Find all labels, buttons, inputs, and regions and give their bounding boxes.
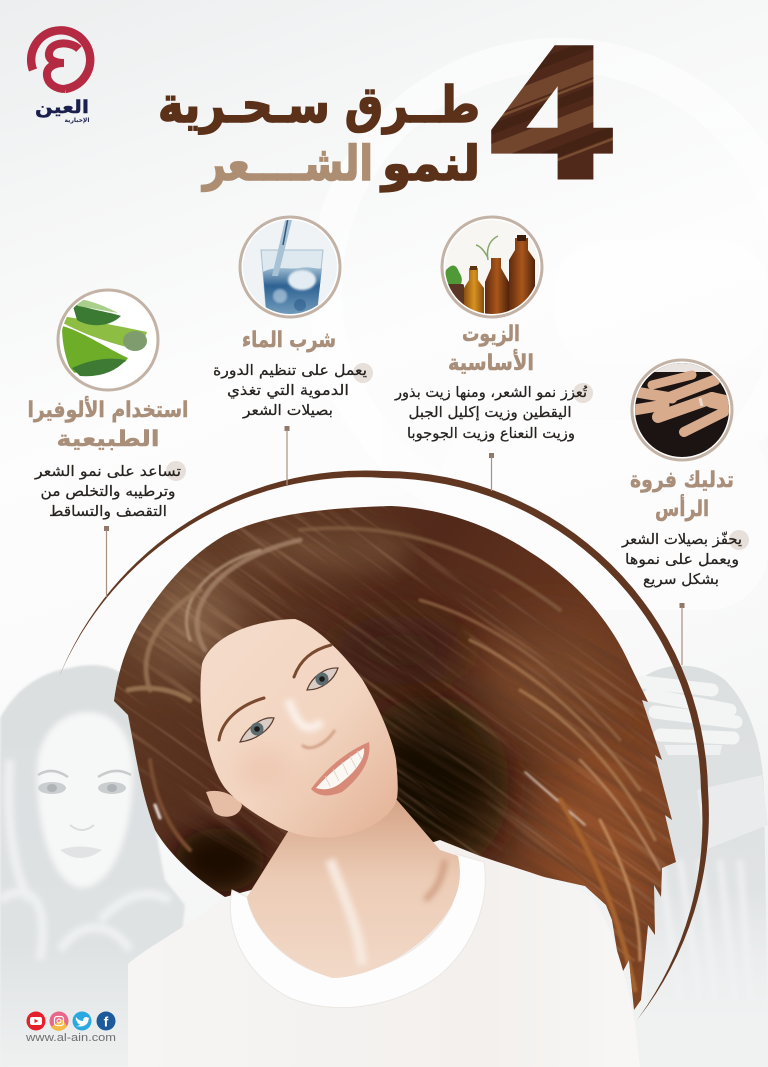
connector — [104, 526, 109, 597]
heading — [448, 322, 534, 376]
cheek shading — [237, 750, 293, 790]
text block — [34, 464, 181, 520]
panel: aloe vera — [28, 290, 188, 597]
face — [200, 619, 398, 838]
icon: twitter — [72, 1012, 92, 1030]
left eye — [240, 718, 274, 742]
headline line 2 tan: الشــــعر — [201, 136, 373, 192]
icon: youtube — [26, 1012, 46, 1030]
bullet dot — [353, 363, 373, 383]
text block: يحفّز بصيلات الشعر — [621, 531, 742, 548]
icon: instagram — [50, 1012, 68, 1031]
heading: استخدام الألوفيرا — [28, 395, 188, 423]
icon: facebook: f — [104, 1014, 109, 1030]
social media icons and website — [25, 1012, 116, 1044]
heading: الزيوت — [462, 322, 520, 347]
heading: تدليك فروة — [630, 468, 734, 493]
connector — [489, 453, 494, 491]
text block: التقصف والتساقط — [49, 504, 167, 520]
neck and chest — [247, 800, 460, 978]
ear — [206, 791, 242, 817]
heading: شرب الماء — [242, 328, 336, 353]
text block: وزيت النعناع وزيت الجوجوبا — [407, 426, 575, 442]
main photo: woman with flowing hair — [27, 506, 676, 1058]
text block: الدموية التي تغذي — [227, 383, 349, 399]
icon: aloe vera — [58, 290, 158, 390]
shirt collar — [230, 854, 485, 1008]
nose — [288, 700, 335, 748]
text block — [621, 531, 742, 588]
text block: وترطيبه والتخلص من — [40, 484, 176, 500]
panel: scalp massage — [621, 360, 749, 665]
decorative background logo shape — [325, 55, 768, 610]
connector — [680, 603, 684, 665]
connector — [284, 426, 290, 485]
right eye — [307, 668, 338, 690]
headline line 1: طــرق سـحـرية — [158, 76, 480, 135]
text block: تُعزز نمو الشعر، ومنها زيت بذور — [394, 385, 587, 401]
panel: drinking water — [213, 216, 373, 485]
background photo: faded woman portrait — [0, 665, 185, 1067]
text block: ويعمل على نموها — [625, 552, 739, 568]
icon: glass of water — [240, 216, 340, 320]
heading: الرأس — [655, 493, 709, 522]
hair — [114, 506, 676, 1010]
facial features — [219, 645, 369, 795]
icon: oil bottles — [442, 217, 542, 317]
text block — [213, 363, 367, 419]
logo: Al-Ain — [31, 30, 90, 124]
headline line 2 dark: لنمو — [380, 136, 480, 192]
mouth — [311, 742, 369, 795]
shirt — [128, 840, 640, 1067]
text block: بشكل سريع — [643, 572, 719, 588]
icon: scalp massage hands — [632, 360, 732, 460]
text block: بصيلات الشعر — [242, 403, 333, 419]
text block: تساعد على نمو الشعر — [34, 464, 181, 480]
logo wordmark: العين — [35, 97, 89, 118]
background photo: faded scalp treatment — [640, 666, 768, 1040]
text block: يعمل على تنظيم الدورة — [213, 363, 367, 379]
eyebrows — [219, 645, 331, 740]
heading — [630, 468, 734, 522]
text block: اليقطين وزيت إكليل الجبل — [408, 405, 572, 421]
logo tagline: الإخبارية — [65, 117, 89, 124]
bullet dot — [729, 530, 749, 550]
bullet dot — [573, 383, 593, 403]
title — [158, 10, 610, 216]
number 4: 4 — [492, 10, 610, 216]
heading: الأساسية — [448, 348, 534, 376]
heading — [28, 395, 188, 452]
bullet dot — [166, 461, 186, 481]
text block — [394, 385, 587, 442]
website: www.al-ain.com — [25, 1032, 116, 1044]
circular frame arc — [59, 470, 709, 1020]
panel: essential oils — [394, 217, 593, 491]
heading: الطبيعية — [56, 427, 160, 452]
